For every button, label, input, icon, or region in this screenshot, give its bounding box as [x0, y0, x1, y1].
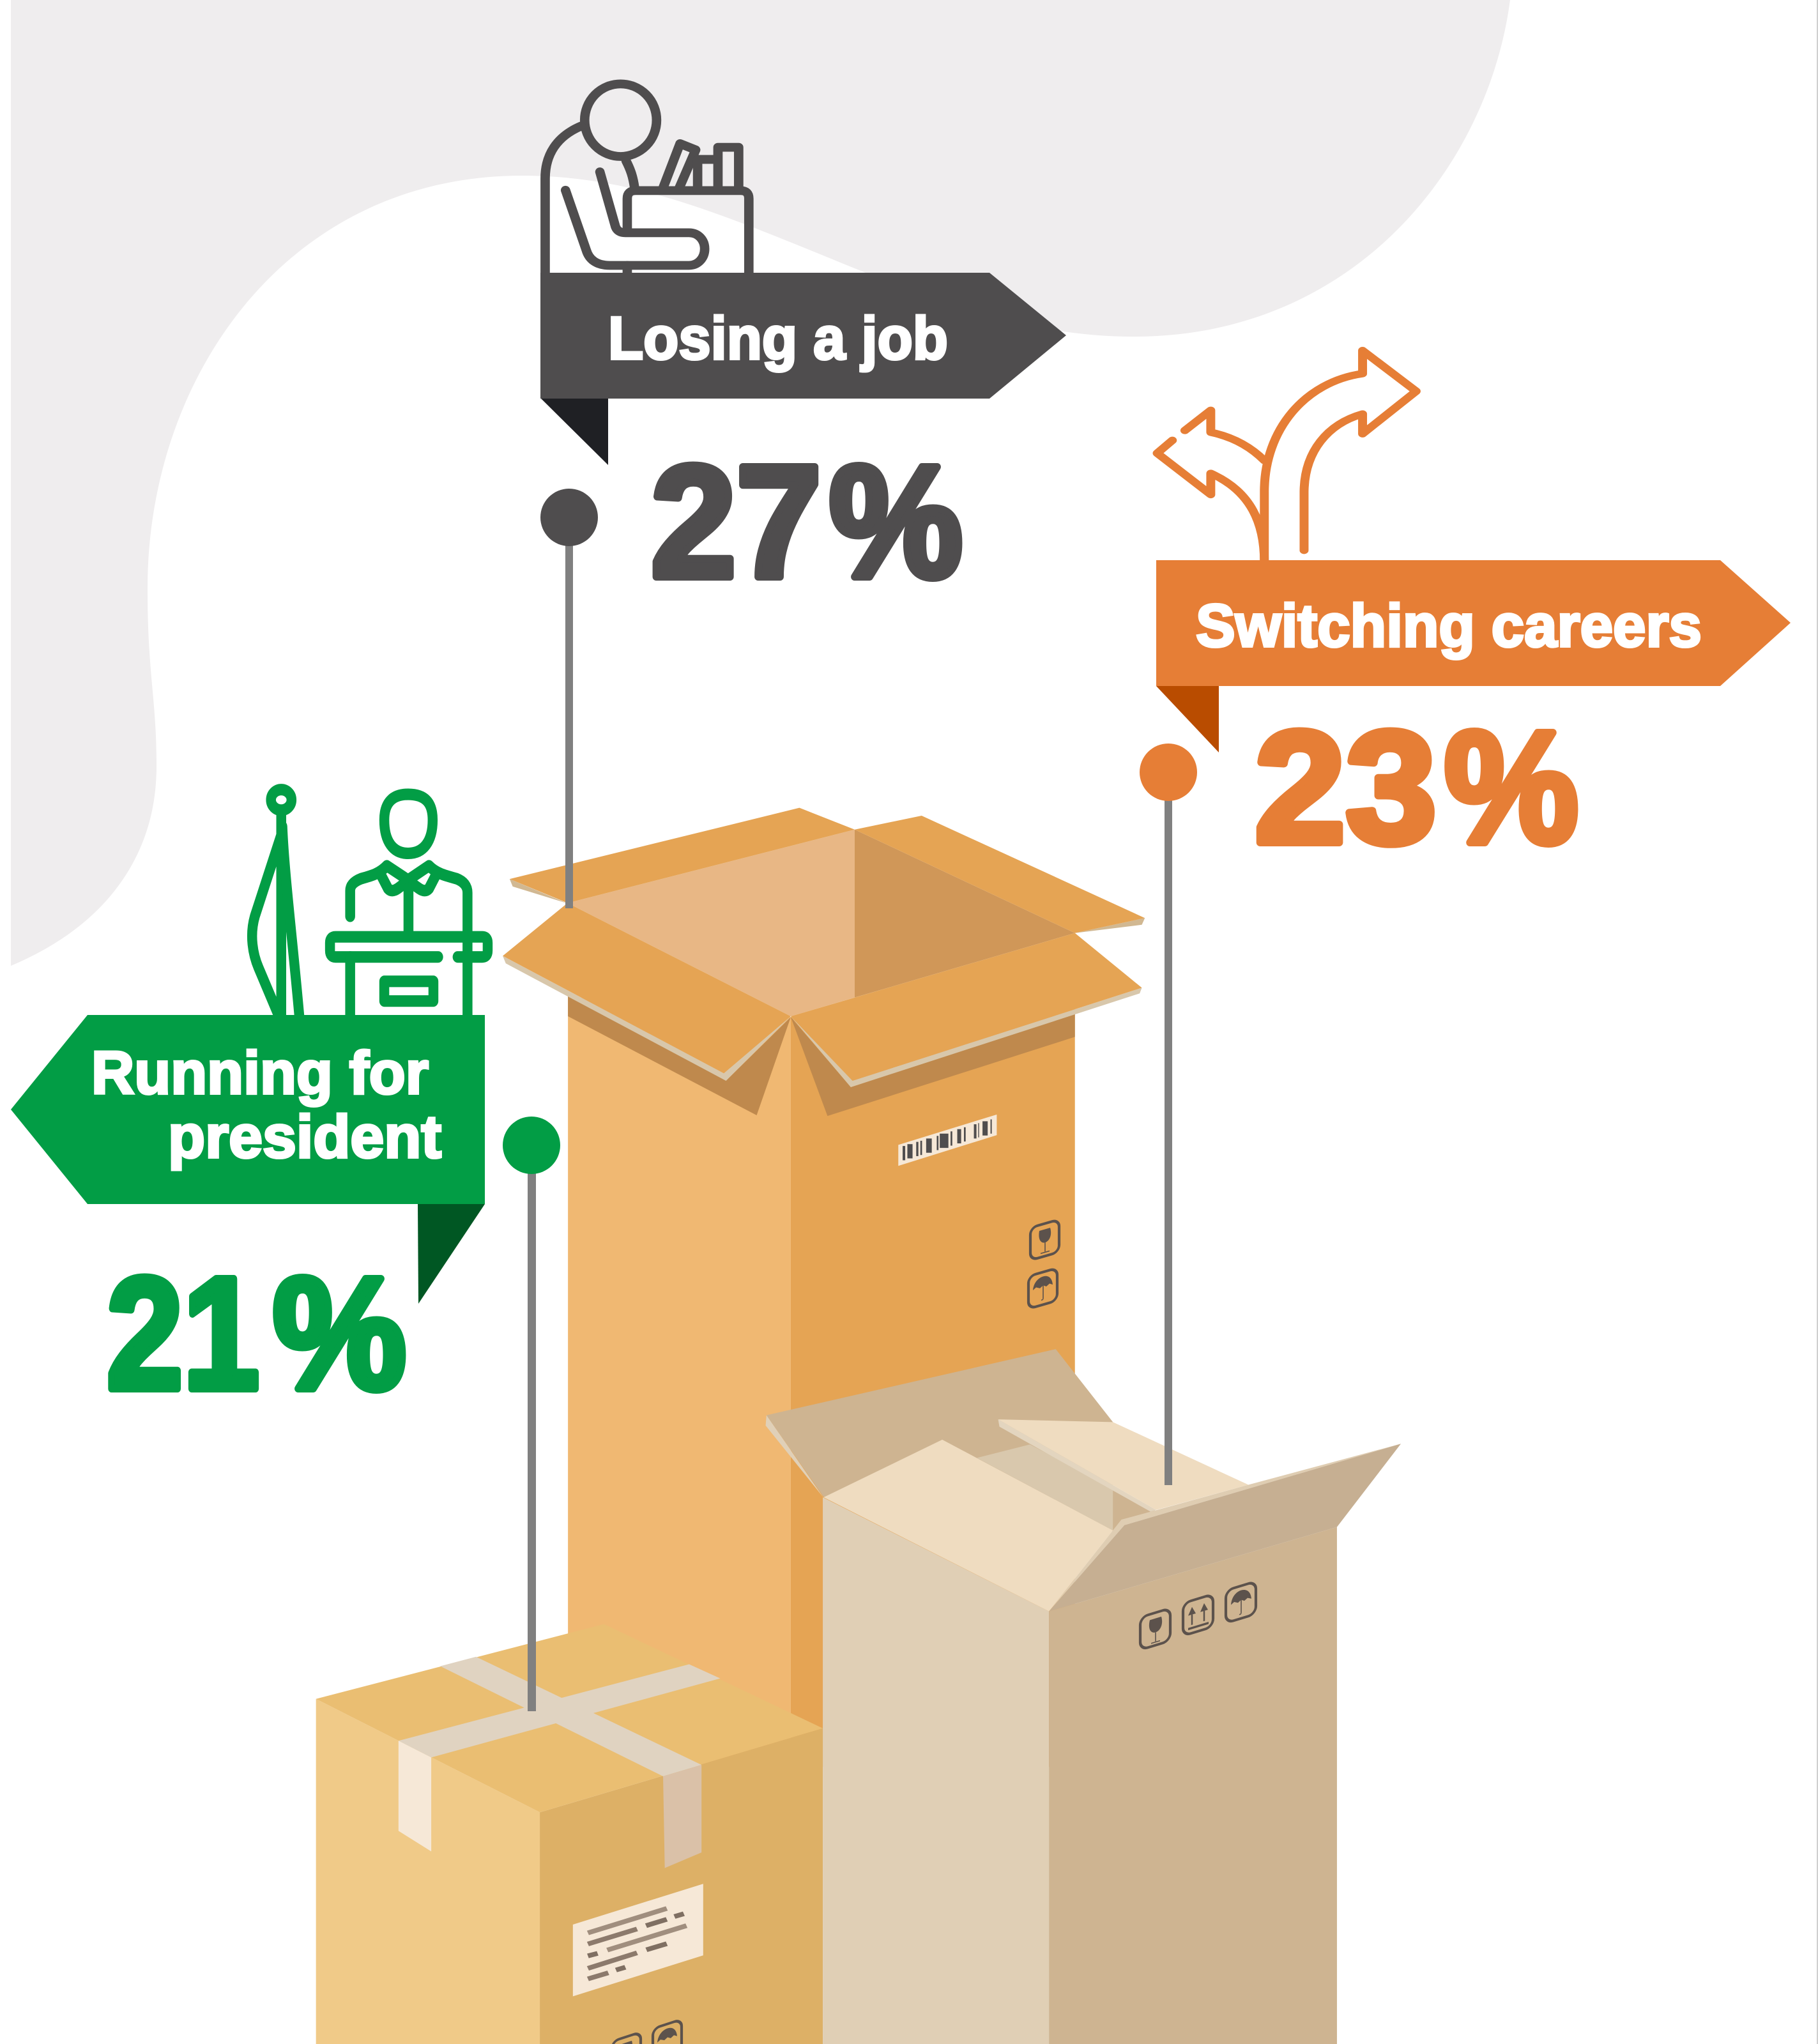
percentage: 21: [107, 1244, 259, 1422]
ribbon label: [91, 1039, 441, 1171]
ribbon label: Running for: [91, 1039, 429, 1107]
ribbon fold: [541, 399, 608, 465]
ribbon fold: [418, 1204, 485, 1304]
box right face: [540, 1728, 823, 2044]
front right flap: [791, 933, 1142, 1087]
interior left wall: [567, 830, 855, 1016]
percentage: [107, 1244, 406, 1422]
handling icon: umbrella: [1028, 1268, 1057, 1309]
tall orange open box: [503, 808, 1145, 1767]
box left face: [568, 996, 791, 1767]
item: switching careers: [1140, 351, 1791, 1485]
item: losing a job: [540, 84, 1066, 908]
handling icon: this way up arrows: [1183, 1594, 1213, 1636]
percentage: %: [273, 1244, 406, 1422]
percentage: 27: [651, 432, 821, 611]
pin: [540, 489, 598, 546]
back right flap: [855, 816, 1145, 933]
icon: forking arrows: [1157, 351, 1416, 561]
percentage: [651, 432, 963, 611]
back left flap: [766, 1349, 1113, 1532]
percentage: %: [829, 432, 963, 611]
ribbon label: Losing a job: [608, 305, 948, 372]
icon: person at desk: [545, 84, 749, 292]
flap shadow left: [568, 995, 791, 1115]
flap shadow right: [791, 1013, 1075, 1116]
box left face: [316, 1699, 540, 2044]
box right face: [791, 1002, 1075, 1767]
pin: [1140, 744, 1197, 801]
leader line: [528, 1145, 536, 1711]
packing tape: [399, 1657, 720, 1868]
ribbon label: Switching careers: [1196, 592, 1702, 660]
box left face: [823, 1497, 1049, 2044]
percentage: 23: [1255, 698, 1437, 876]
item: running for president: [11, 789, 560, 1711]
handling icon: fragile glass: [1030, 1219, 1059, 1260]
ribbon fold: [1156, 686, 1219, 752]
barcode sticker: [898, 1115, 997, 1166]
shipping label: [573, 1884, 703, 1996]
box right face: [1049, 1527, 1337, 2044]
background blob: [11, 0, 1510, 966]
front left flap: [823, 1440, 1113, 1612]
ribbon label: president: [168, 1103, 441, 1171]
box top: [316, 1624, 823, 1812]
leader line: [1165, 772, 1172, 1485]
front right flap: [1049, 1444, 1401, 1612]
leader line: [565, 517, 573, 908]
back right flap: [998, 1419, 1248, 1512]
icon: speaker at podium with flag: [252, 789, 487, 1023]
pin: [503, 1117, 560, 1174]
front left flap: [503, 903, 791, 1081]
ribbon: [540, 273, 1066, 399]
closed taped box: [316, 1624, 823, 2044]
handling icon: umbrella, cropped: [653, 2019, 682, 2044]
ribbon: [1156, 560, 1791, 686]
percentage: [1255, 698, 1578, 876]
ribbon: [11, 1015, 485, 1204]
handling icon: umbrella: [1226, 1582, 1256, 1623]
interior right wall: [855, 830, 1075, 998]
beige open box: [766, 1349, 1401, 2044]
interior shadow wedge: [1113, 1490, 1154, 1530]
handling icon: fragile glass: [1140, 1608, 1170, 1650]
back left flap: [510, 808, 855, 903]
handling icon: fragile glass, cropped: [612, 2032, 641, 2044]
interior wall: [977, 1444, 1156, 1530]
percentage: %: [1444, 698, 1578, 876]
